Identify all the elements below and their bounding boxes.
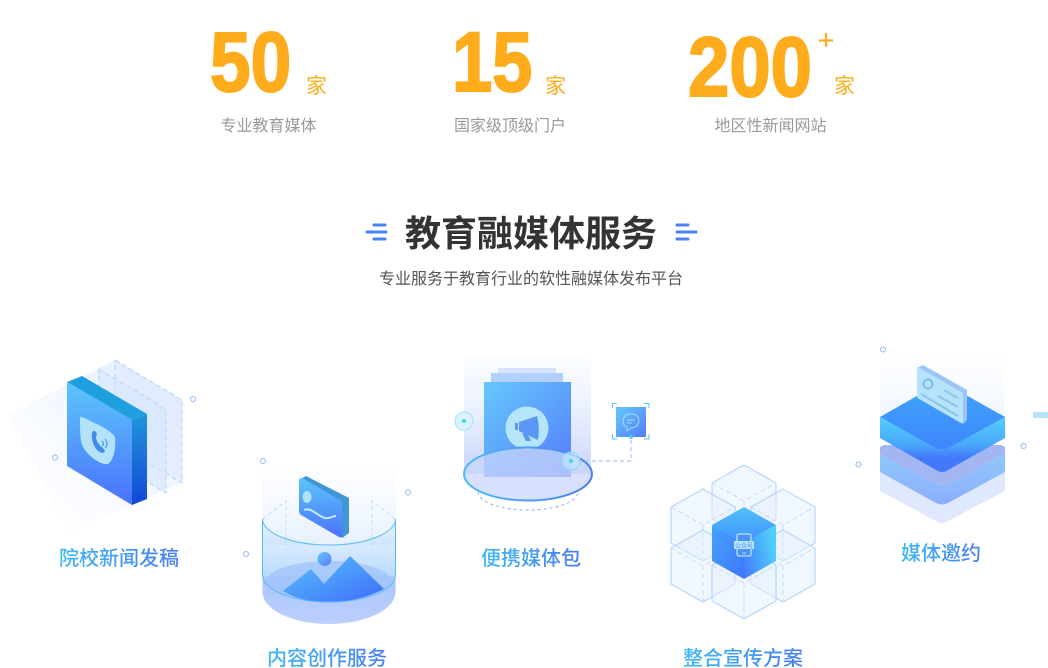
stat: 200+ 家 bbox=[688, 20, 855, 135]
back glow bbox=[880, 354, 1004, 424]
decorative dots bbox=[244, 458, 410, 556]
disc bbox=[464, 448, 592, 500]
decorative dots bbox=[856, 347, 1026, 467]
icon: phone with badge bbox=[734, 534, 754, 556]
stats row bbox=[210, 15, 855, 135]
top slab bbox=[880, 383, 1005, 472]
middle layer bbox=[880, 445, 1005, 504]
dashed frame lines bbox=[262, 501, 396, 570]
heading title: 教育融媒体服务 bbox=[405, 213, 657, 254]
edge tab bbox=[1033, 412, 1048, 418]
stat: 50 家: 专业教育媒体 bbox=[220, 117, 317, 135]
mountains bbox=[283, 556, 384, 602]
section heading bbox=[367, 213, 696, 288]
stat: 15 家 bbox=[452, 15, 566, 135]
heading icon right bbox=[677, 225, 696, 239]
service: 内容创作服务 bbox=[244, 458, 410, 668]
image card bbox=[299, 476, 349, 538]
icon: shield with phone bbox=[80, 417, 115, 464]
cylinder rims bbox=[262, 519, 396, 602]
heading icon left bbox=[367, 225, 386, 239]
contact card bbox=[917, 365, 967, 424]
cylinder wall bbox=[262, 519, 396, 602]
nodes bbox=[455, 412, 580, 470]
dashed back planes bbox=[99, 360, 182, 493]
icon: megaphone bbox=[506, 406, 548, 450]
stat: 15 家: 国家级顶级门户 bbox=[454, 117, 566, 135]
base disc bbox=[262, 576, 396, 624]
back glow bbox=[262, 465, 396, 545]
sun bbox=[318, 552, 332, 566]
service: 院校新闻发稿 bbox=[7, 360, 196, 570]
label: 便携媒体包 bbox=[481, 547, 581, 570]
block bbox=[67, 376, 147, 505]
chat card bbox=[612, 404, 649, 439]
stat: 50 家 bbox=[210, 15, 327, 135]
stat: 200+ 家: 地区性新闻网站 bbox=[714, 117, 827, 135]
central cube bbox=[712, 507, 776, 579]
surrounding cubes bbox=[671, 465, 815, 619]
label: 媒体邀约 bbox=[901, 542, 981, 565]
icon: phone with badge: 公众号 bbox=[735, 543, 753, 550]
stat: 50 家: 家 bbox=[306, 75, 327, 98]
label: 院校新闻发稿 bbox=[59, 547, 179, 570]
service: 媒体邀约 bbox=[856, 347, 1048, 565]
inner floor bbox=[267, 561, 391, 601]
service: 整合宣传方案 bbox=[671, 465, 815, 668]
stat: 15 家: 家 bbox=[545, 75, 566, 98]
stat: 15 家: 15 bbox=[452, 15, 532, 109]
back glow bbox=[464, 358, 591, 474]
stacked sheets bbox=[484, 368, 571, 477]
stat: 50 家: 50 bbox=[210, 15, 291, 109]
connector bbox=[578, 438, 631, 461]
dashed lower ring bbox=[478, 492, 578, 510]
service: 便携媒体包 bbox=[455, 358, 649, 570]
decorative dots bbox=[52, 396, 196, 460]
stat: 200+ 家: 家 bbox=[834, 75, 855, 98]
stat: 200+ 家: 200 bbox=[688, 20, 812, 114]
bottom layer bbox=[880, 440, 1005, 524]
subtitle: 专业服务于教育行业的软性融媒体发布平台 bbox=[379, 270, 683, 288]
ground diamond bbox=[7, 360, 182, 532]
